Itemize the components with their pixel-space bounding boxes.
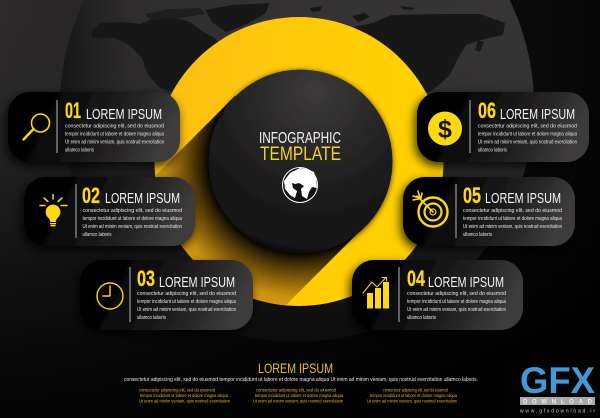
center disc <box>208 70 392 254</box>
logo url: www.gfxdownload.ir <box>520 408 595 414</box>
body 03: ullamco laboris <box>137 315 166 321</box>
number 06: 06 <box>478 98 496 123</box>
icon: dollar coin: $ <box>438 116 452 144</box>
card 05 <box>403 177 575 246</box>
body 06: consectetur adipiscing elit, sed do eiusmod <box>478 124 577 130</box>
footer column 3: consectetur adipiscing elit, sed do eiusmod <box>383 388 448 392</box>
footer column 2 <box>253 388 343 404</box>
footer column 3: Ut enim ad minim veniam, quis nostrud exercitation <box>367 398 457 404</box>
body 01: Ut enim ad minim veniam, quis nostrud exercitation <box>65 140 164 146</box>
heading 02: LOREM IPSUM <box>105 190 180 207</box>
footer column 3: tempor incididunt ut labore et dolore magna aliqua <box>370 393 457 398</box>
body 06: tempor incididunt ut labore et dolore magna aliqua <box>478 132 577 138</box>
body 04 <box>407 291 506 321</box>
icon: clock <box>97 283 123 309</box>
icon: globe <box>282 168 318 202</box>
number 02: 02 <box>82 183 100 208</box>
body 02: Ut enim ad minim veniam, quis nostrud exercitation <box>82 224 182 230</box>
body 05: Ut enim ad minim veniam, quis nostrud exercitation <box>463 224 562 230</box>
body 06: Ut enim ad minim veniam, quis nostrud exercitation <box>478 140 577 146</box>
logo bar text: DOWNLOAD <box>523 400 593 406</box>
watermark logo <box>505 360 600 418</box>
body 06 <box>478 124 577 154</box>
icon: dollar coin <box>428 112 462 146</box>
body 05 <box>463 208 562 238</box>
card 03 <box>80 260 253 330</box>
footer column 1: consectetur adipiscing elit, sed do eiusmod <box>139 388 215 392</box>
footer column 1: Ut enim ad minim veniam, quis nostrud exercitation <box>139 398 230 404</box>
heading 03: LOREM IPSUM <box>159 274 235 291</box>
icon: target <box>413 191 448 226</box>
long shadow <box>155 96 358 306</box>
card 06 <box>417 92 589 162</box>
body 04: tempor incididunt ut labore et dolore magna aliqua <box>407 299 506 305</box>
body 01: tempor incididunt ut labore et dolore magna aliqua <box>65 132 164 138</box>
logo letters: GFX <box>520 360 595 401</box>
body 01 <box>65 124 164 154</box>
world map <box>92 3 505 92</box>
body 03: Ut enim ad minim veniam, quis nostrud exercitation <box>137 307 236 313</box>
body 01: ullamco laboris <box>65 148 94 154</box>
logo bar <box>520 397 595 405</box>
icon: growth chart <box>363 278 389 308</box>
card 02 <box>24 177 195 246</box>
footer column 2: Ut enim ad minim veniam, quis nostrud exercitation <box>253 398 343 404</box>
heading 01: LOREM IPSUM <box>86 106 162 123</box>
center title: INFOGRAPHIC <box>259 130 341 147</box>
yellow ring <box>154 17 444 306</box>
body 01: consectetur adipiscing elit, sed do eiusmod <box>65 124 164 130</box>
heading 05: LOREM IPSUM <box>485 190 561 207</box>
footer text <box>124 360 478 404</box>
body 06: ullamco laboris <box>478 148 507 154</box>
body 04: consectetur adipiscing elit, sed do eiusmod <box>407 291 506 297</box>
card 04 <box>352 260 523 330</box>
body 03: tempor incididunt ut labore et dolore magna aliqua <box>137 299 236 305</box>
footer column 1: tempor incididunt ut labore et dolore magna aliqua <box>140 393 228 398</box>
footer column 3 <box>367 388 457 404</box>
icon: magnifier <box>24 114 50 140</box>
body 05: consectetur adipiscing elit, sed do eiusmod <box>463 208 562 214</box>
footer column 1 <box>139 388 230 404</box>
icon: light bulb <box>40 194 67 226</box>
card 01 <box>8 92 180 162</box>
number 05: 05 <box>463 183 481 208</box>
body 02: tempor incididunt ut labore et dolore magna aliqua <box>82 216 182 222</box>
number 03: 03 <box>137 266 155 291</box>
body 02 <box>82 208 182 238</box>
center subtitle: TEMPLATE <box>260 143 341 165</box>
number 04: 04 <box>407 266 426 291</box>
body 03 <box>137 291 236 321</box>
heading 04: LOREM IPSUM <box>428 274 504 291</box>
footer summary: consectetur adipiscing elit, sed do eiusmod tempor incididunt ut labore et dolore magna aliqua Ut enim ad minim veniam, quis nostrud exercitation ullamco laboris. <box>124 377 478 383</box>
footer column 2: tempor incididunt ut labore et dolore magna aliqua <box>255 393 343 398</box>
body 04: Ut enim ad minim veniam, quis nostrud exercitation <box>407 307 506 313</box>
number 01: 01 <box>65 98 81 123</box>
body 05: tempor incididunt ut labore et dolore magna aliqua <box>463 216 562 222</box>
body 02: ullamco laboris <box>82 232 112 238</box>
body 02: consectetur adipiscing elit, sed do eiusmod <box>82 208 182 214</box>
body 04: ullamco laboris <box>407 315 436 321</box>
body 03: consectetur adipiscing elit, sed do eiusmod <box>137 291 236 297</box>
body 05: ullamco laboris <box>463 232 492 238</box>
footer column 2: consectetur adipiscing elit, sed do eiusmod <box>256 388 336 392</box>
footer heading: LOREM IPSUM <box>258 360 333 376</box>
